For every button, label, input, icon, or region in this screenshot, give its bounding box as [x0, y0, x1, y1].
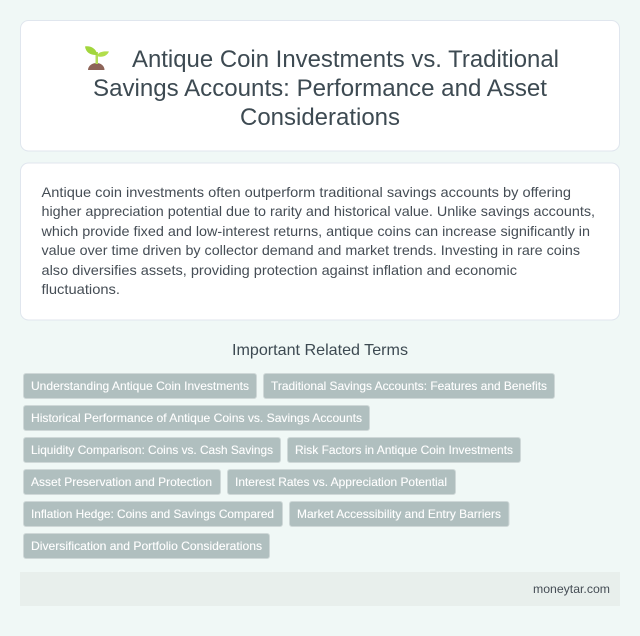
tag: [264, 374, 554, 398]
heading: related terms: Important Related Terms: [232, 342, 408, 359]
tag: [288, 438, 520, 462]
tag: Diversification and Portfolio Considerations: [31, 539, 262, 553]
tag: [24, 470, 220, 494]
title text: Savings Accounts: Performance and Asset: [93, 75, 547, 102]
tag: Asset Preservation and Protection: [31, 475, 212, 489]
tag: [24, 534, 270, 558]
tag: Interest Rates vs. Appreciation Potential: [235, 475, 447, 489]
tag: Market Accessibility and Entry Barriers: [297, 507, 501, 521]
summary text: Antique coin investments often outperform traditional savings accounts by offering: [42, 184, 571, 200]
summary text: higher appreciation potential due to rarity and historical value. Unlike savings accounts,: [42, 203, 595, 219]
tag: [290, 502, 509, 526]
tag: Inflation Hedge: Coins and Savings Compared: [31, 507, 274, 521]
tag: Liquidity Comparison: Coins vs. Cash Savings: [31, 443, 273, 457]
footer text: moneytar.com: [533, 582, 610, 596]
tag group: related terms: [24, 374, 554, 558]
summary text: also diversifies assets, providing protection against inflation and economic: [42, 262, 517, 278]
tag: Historical Performance of Antique Coins vs. Savings Accounts: [31, 411, 362, 425]
title text: Antique Coin Investments vs. Traditional: [132, 46, 559, 73]
tag: Risk Factors in Antique Coin Investments: [295, 443, 513, 457]
summary text: which provide fixed and low-interest returns, antique coins can increase significantly in: [40, 223, 590, 239]
tag: [24, 374, 256, 398]
summary text: fluctuations.: [42, 281, 120, 297]
summary text: value over time driven by collector demand and market trends. Investing in rare coins: [42, 242, 580, 258]
summary text: [40, 184, 595, 297]
tag: Understanding Antique Coin Investments: [31, 379, 249, 393]
tag: [24, 502, 282, 526]
title panel: [20, 20, 620, 151]
footer: [20, 572, 620, 606]
title text: Considerations: [240, 104, 400, 131]
icon: seedling: [85, 46, 109, 70]
tag: [24, 406, 370, 430]
tag: Traditional Savings Accounts: Features and Benefits: [271, 379, 547, 393]
tag: [228, 470, 456, 494]
panel: summary: [20, 163, 620, 320]
title text: [93, 46, 559, 131]
tag: [24, 438, 280, 462]
